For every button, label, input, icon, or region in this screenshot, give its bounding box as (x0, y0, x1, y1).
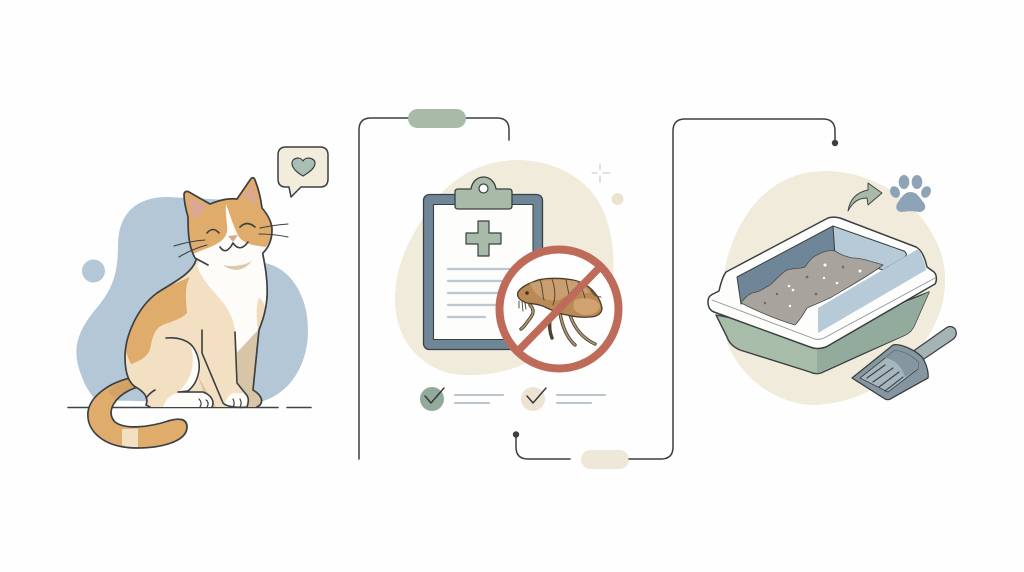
panel: vet clipboard and flea (395, 160, 624, 411)
connector: bottom link with beige pill (513, 119, 838, 469)
text lines (448, 269, 510, 317)
rear leg shadow (198, 329, 262, 407)
beige blob (721, 171, 945, 405)
beige blob (395, 160, 614, 375)
back paw (163, 393, 213, 407)
ears inner (188, 183, 257, 220)
body outline (125, 260, 196, 407)
chest side shade (257, 298, 265, 330)
flea (518, 278, 602, 345)
mouth (220, 242, 248, 251)
cat body (125, 248, 267, 407)
green pill (408, 109, 466, 128)
blue background blob (76, 197, 308, 404)
clip (455, 177, 512, 209)
no-flea sign (499, 249, 619, 369)
whiskers (174, 224, 288, 257)
tray rim (708, 217, 936, 348)
curved arrow (848, 183, 882, 211)
ground line (68, 406, 311, 408)
front inner wall (818, 249, 926, 333)
beige pill (581, 450, 629, 469)
paw print (888, 175, 933, 212)
prohibition ring and slash (500, 250, 618, 368)
connector dot (513, 431, 519, 438)
medical cross (466, 221, 501, 256)
litter tray base (716, 292, 929, 374)
head outline (184, 178, 272, 265)
nose (228, 235, 238, 242)
checklist item: green (420, 387, 503, 411)
sparkle (592, 164, 610, 182)
smiling eyes (207, 224, 255, 233)
blue dot (82, 260, 105, 282)
white chest (197, 248, 267, 352)
cat tail (88, 378, 187, 448)
litter specks (764, 264, 862, 307)
rim lip line (712, 278, 935, 340)
panel: litter box (708, 171, 956, 405)
clipboard (424, 177, 542, 350)
orange face patch (184, 178, 272, 254)
inner wall left (737, 226, 835, 304)
front paw (225, 393, 249, 407)
connector: left frame with green pill (359, 109, 509, 459)
speech bubble with heart (278, 147, 328, 197)
beige dot (612, 193, 624, 205)
panel: happy cat (68, 147, 328, 448)
scoop (852, 327, 956, 400)
checklist item: beige (521, 387, 605, 411)
legs and haunch lines (146, 330, 248, 407)
connector dot (832, 140, 838, 146)
litter (741, 251, 883, 325)
toe lines (199, 399, 241, 407)
orange back patch (126, 277, 190, 364)
chin shade (223, 261, 252, 270)
cat head (174, 178, 288, 270)
haunch highlight (178, 343, 200, 392)
inner wall right (833, 226, 906, 270)
